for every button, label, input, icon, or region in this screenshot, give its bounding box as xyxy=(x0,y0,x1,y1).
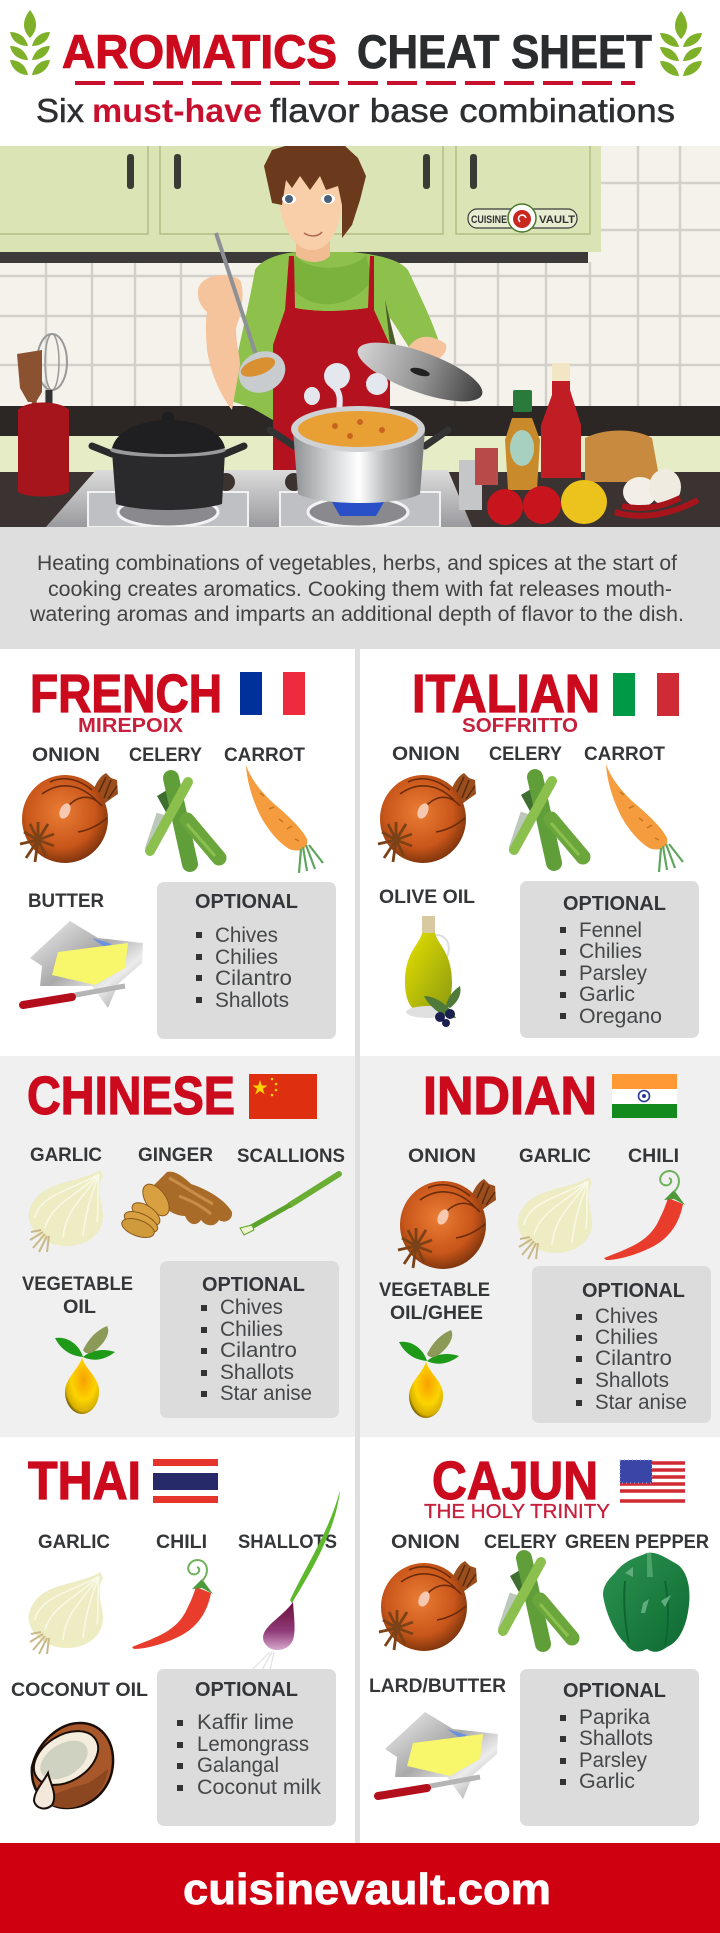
panel: thai: SHALLOTS xyxy=(238,1532,337,1553)
flag: usa xyxy=(620,1460,685,1504)
icon: scallion xyxy=(240,1174,339,1235)
optional box: OPTIONAL xyxy=(563,1680,666,1702)
optional box: Chilies xyxy=(595,1326,658,1349)
panel: chinese: GINGER xyxy=(138,1145,213,1166)
subtitle: Six xyxy=(36,92,85,129)
panel: cajun: CELERY xyxy=(484,1532,557,1553)
icon: green pepper xyxy=(603,1553,689,1652)
cabinets xyxy=(0,140,601,263)
flag: italy xyxy=(613,673,679,716)
optional box: Shallots xyxy=(215,989,289,1012)
optional box: Star anise xyxy=(220,1382,312,1405)
title: aromatics cheat sheet: CHEAT SHEET xyxy=(357,25,652,78)
icon: chili xyxy=(604,1171,685,1260)
icon: garlic xyxy=(29,1170,103,1252)
heading: indian: INDIAN xyxy=(423,1066,597,1126)
flag: france xyxy=(240,672,305,715)
icon: butter xyxy=(23,921,143,1008)
icon: vegetable oil xyxy=(55,1326,115,1414)
optional box: Chilies xyxy=(215,946,278,969)
optional box: Lemongrass xyxy=(197,1733,309,1756)
optional box: Shallots xyxy=(595,1369,669,1392)
steam xyxy=(304,363,388,420)
optional box: OPTIONAL xyxy=(563,893,666,915)
optional box: Star anise xyxy=(595,1391,687,1414)
icon: celery xyxy=(513,777,583,863)
flag: india xyxy=(612,1074,677,1118)
subtitle: must-have xyxy=(92,92,262,129)
panel: indian: CHILI xyxy=(628,1146,679,1167)
footer url: cuisinevault.com xyxy=(183,1865,551,1914)
optional box: Chives xyxy=(595,1305,658,1328)
heading: cajun: CAJUN xyxy=(432,1451,598,1511)
icon: olive oil bottle xyxy=(405,916,461,1027)
icon: vegetable oil xyxy=(399,1330,459,1418)
man xyxy=(198,146,446,470)
condiments and vegetables xyxy=(459,363,698,525)
panel: italian: CELERY xyxy=(489,744,562,765)
icon: shallot xyxy=(252,1490,340,1670)
panel: indian: GARLIC xyxy=(519,1146,591,1167)
panel: indian: ONION xyxy=(408,1146,476,1167)
optional box: Cilantro xyxy=(595,1347,672,1370)
optional box: Chilies xyxy=(220,1318,283,1341)
optional box: Shallots xyxy=(220,1361,294,1384)
panel: cajun: GREEN PEPPER xyxy=(565,1532,709,1553)
subheading: mirepoix: MIREPOIX xyxy=(78,715,184,737)
icon: garlic xyxy=(518,1177,592,1259)
black pot xyxy=(92,412,244,510)
icon: left wheat sprig xyxy=(10,10,50,75)
panel: indian: VEGETABLE xyxy=(379,1280,490,1301)
icon: garlic xyxy=(29,1572,103,1654)
icon: chili xyxy=(132,1560,213,1649)
optional box: Chives xyxy=(220,1296,283,1319)
stove xyxy=(46,470,472,527)
illustration: man cooking in kitchen xyxy=(0,146,720,527)
panel: chinese xyxy=(22,1066,345,1418)
icon: onion xyxy=(20,773,118,863)
logo: cuisine vault xyxy=(468,204,577,232)
heading: chinese: CHINESE xyxy=(27,1066,235,1126)
icon: onion xyxy=(379,1561,477,1651)
optional box: Garlic xyxy=(579,983,635,1006)
intro text: Heating combinations of vegetables, herbs, and spices at the start of xyxy=(37,552,677,575)
intro text: cooking creates aromatics. Cooking them with fat releases mouth- xyxy=(48,578,672,601)
icon: carrot xyxy=(606,764,683,872)
optional box xyxy=(157,1669,336,1826)
panel: chinese: GARLIC xyxy=(30,1145,102,1166)
flag: china xyxy=(249,1074,317,1119)
footer band xyxy=(0,1843,720,1933)
optional box xyxy=(520,1669,699,1826)
optional box: OPTIONAL xyxy=(202,1274,305,1296)
heading: italian: ITALIAN xyxy=(412,664,600,724)
panel: french: ONION xyxy=(32,745,100,766)
panel: french: CELERY xyxy=(129,745,202,766)
optional box: Shallots xyxy=(579,1727,653,1750)
optional box xyxy=(157,882,336,1039)
intro text panel xyxy=(0,527,720,649)
subtitle: flavor base combinations xyxy=(270,92,675,129)
icon: right wheat sprig xyxy=(660,11,702,76)
optional box: OPTIONAL xyxy=(195,891,298,913)
panel: chinese: SCALLIONS xyxy=(237,1146,345,1167)
utensil holder with whisk and spatula xyxy=(17,334,69,496)
subheading: soffritto: SOFFRITTO xyxy=(462,715,578,737)
flag: thailand xyxy=(153,1459,218,1503)
header: title and subtitle xyxy=(10,10,702,129)
optional box xyxy=(520,881,699,1038)
optional box: Paprika xyxy=(579,1706,650,1729)
icon: celery xyxy=(502,1558,572,1644)
optional box: Galangal xyxy=(197,1754,279,1777)
panel: cajun xyxy=(369,1451,709,1826)
panel: chinese: VEGETABLE xyxy=(22,1274,133,1295)
panel: french xyxy=(20,664,336,1039)
intro text: watering aromas and imparts an additional depth of flavor to the dish. xyxy=(29,603,684,626)
panel: italian xyxy=(378,664,699,1038)
panel: thai: CHILI xyxy=(156,1532,207,1553)
optional box: Kaffir lime xyxy=(197,1711,294,1734)
optional box xyxy=(532,1266,711,1423)
optional box: Coconut milk xyxy=(197,1776,321,1799)
panel: cajun: ONION xyxy=(391,1532,460,1553)
optional box: Parsley xyxy=(579,1749,647,1772)
optional box xyxy=(160,1261,339,1418)
backsplash and counter xyxy=(0,406,720,527)
title: aromatics cheat sheet: AROMATICS xyxy=(62,25,337,78)
pot lid xyxy=(351,331,489,413)
icon: butter xyxy=(378,1712,498,1799)
subheading: the holy trinity: THE HOLY TRINITY xyxy=(424,1501,610,1523)
panel: italian: OLIVE OIL xyxy=(379,887,475,908)
panel: cajun: LARD/BUTTER xyxy=(369,1676,506,1697)
panel: thai: COCONUT OIL xyxy=(11,1680,148,1701)
icon: celery xyxy=(149,778,219,864)
panel: french: BUTTER xyxy=(28,891,104,912)
logo: cuisine vault: CUISINE xyxy=(471,214,507,226)
panel: french: CARROT xyxy=(224,745,305,766)
heading: french: FRENCH xyxy=(30,664,222,724)
panel: chinese: OIL xyxy=(63,1297,96,1318)
panel: thai xyxy=(11,1451,340,1826)
icon: ginger xyxy=(119,1172,232,1241)
panel: indian: OIL/GHEE xyxy=(390,1303,483,1324)
optional box: OPTIONAL xyxy=(582,1280,685,1302)
optional box: Oregano xyxy=(579,1005,662,1028)
optional box: OPTIONAL xyxy=(195,1679,298,1701)
icon: onion xyxy=(378,773,476,863)
panel: italian: ONION xyxy=(392,744,460,765)
ladle xyxy=(216,233,292,400)
panel: thai: GARLIC xyxy=(38,1532,110,1553)
icon: coconut xyxy=(24,1720,113,1808)
optional box: Chilies xyxy=(579,940,642,963)
panel: indian xyxy=(379,1066,711,1423)
optional box: Cilantro xyxy=(215,967,292,990)
optional box: Chives xyxy=(215,924,278,947)
optional box: Garlic xyxy=(579,1770,635,1793)
icon: carrot xyxy=(246,765,323,873)
optional box: Cilantro xyxy=(220,1339,297,1362)
heading: thai: THAI xyxy=(28,1451,141,1511)
optional box: Parsley xyxy=(579,962,647,985)
logo: cuisine vault: VAULT xyxy=(539,214,575,226)
silver pot with soup xyxy=(270,406,448,503)
panel: italian: CARROT xyxy=(584,744,665,765)
icon: onion xyxy=(398,1179,496,1269)
optional box: Fennel xyxy=(579,919,642,942)
